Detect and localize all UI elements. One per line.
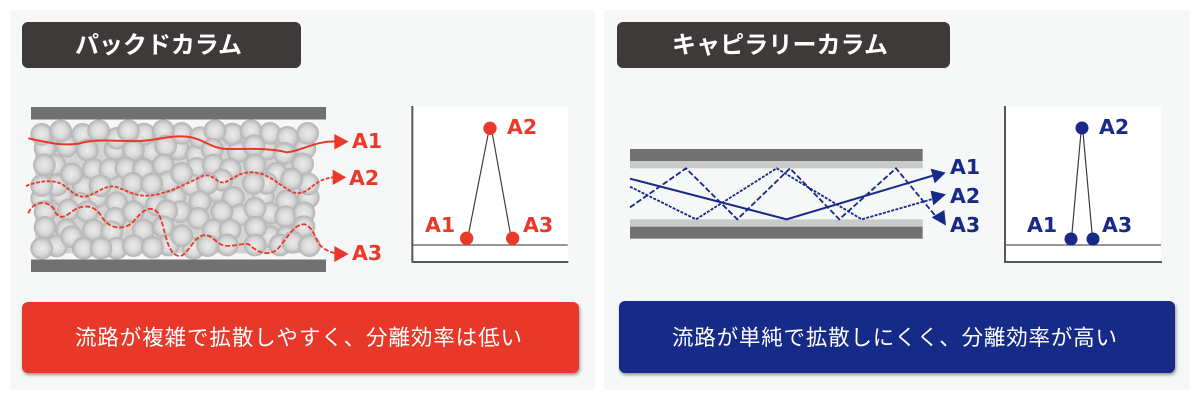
- heading: packed column: パックドカラム: [75, 32, 242, 59]
- diagram: packed column with particles and paths: [26, 107, 382, 272]
- chart label A3: A3: [1102, 213, 1132, 237]
- flow path A2: [630, 168, 946, 219]
- label A3: A3: [352, 241, 382, 265]
- chart label A2: A2: [507, 115, 537, 139]
- chromatogram: packed column: [412, 106, 568, 263]
- flow path A2: [26, 170, 346, 197]
- flow path A1: [28, 134, 349, 152]
- chart label A1: A1: [425, 213, 455, 237]
- column walls: [31, 107, 326, 272]
- flow path A3: [28, 203, 349, 262]
- chart label A3: A3: [523, 213, 553, 237]
- chart label A1: A1: [1027, 213, 1057, 237]
- label A2: A2: [349, 166, 379, 190]
- chromatogram: capillary column: [1005, 106, 1162, 263]
- heading: capillary column: [617, 22, 950, 68]
- panel: packed column: [10, 10, 595, 390]
- result banner: packed column: 流路が複雑で拡散しやすく、分離効率は低い: [75, 326, 522, 350]
- label A2: A2: [950, 184, 980, 208]
- result banner: packed column: [22, 302, 579, 373]
- diagram: capillary column with paths: [630, 149, 946, 239]
- heading: packed column: [22, 22, 301, 68]
- heading: capillary column: キャピラリーカラム: [672, 32, 888, 59]
- chart label A2: A2: [1099, 115, 1129, 139]
- label A1: A1: [950, 155, 980, 179]
- panel: capillary column: [604, 10, 1190, 390]
- flow path A1: [630, 169, 946, 219]
- label A3: A3: [950, 213, 980, 237]
- label A1: A1: [352, 129, 382, 153]
- column walls: [630, 149, 923, 239]
- packed particles: [30, 119, 321, 260]
- flow path A3: [630, 168, 946, 226]
- result banner: capillary column: 流路が単純で拡散しにくく、分離効率が高い: [672, 326, 1117, 350]
- result banner: capillary column: [619, 301, 1175, 373]
